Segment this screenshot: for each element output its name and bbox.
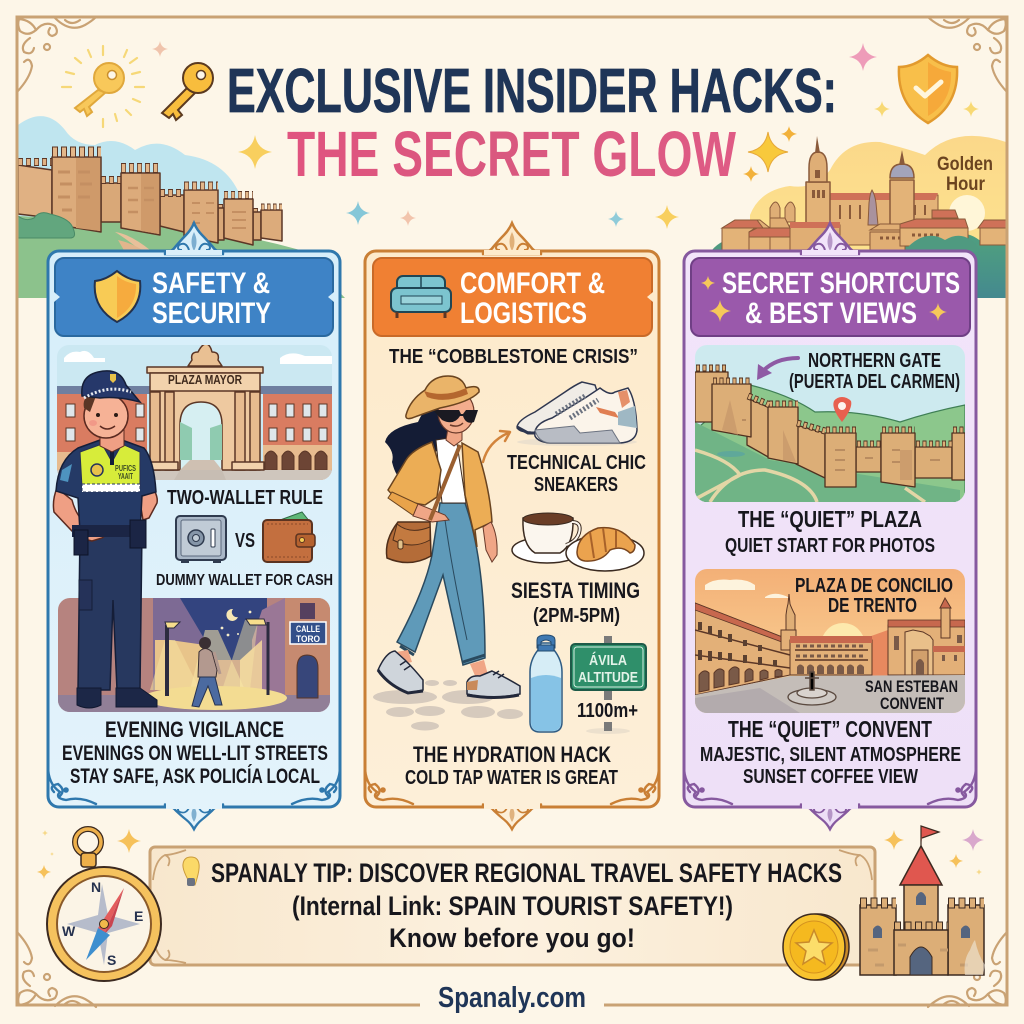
illustration: Plaza de Concilio de Trento: DE TRENTO xyxy=(828,595,917,617)
panel header: comfort xyxy=(373,258,653,336)
text: hydration hack xyxy=(405,742,618,789)
panel header: safety: SAFETY & xyxy=(152,267,270,300)
tip line 3: Know before you go! xyxy=(389,923,635,953)
icon: water bottle xyxy=(530,635,562,732)
main building xyxy=(825,195,938,245)
text: evening vigilance: EVENING VIGILANCE xyxy=(105,717,284,742)
ground xyxy=(695,675,965,713)
arms xyxy=(53,488,112,541)
panel header: comfort: LOGISTICS xyxy=(460,297,587,330)
icon: shield xyxy=(95,271,140,322)
text: sneakers: SNEAKERS xyxy=(534,474,618,496)
illustration: woman walking xyxy=(373,376,523,730)
icon: compass: S xyxy=(107,952,116,968)
text: sneakers: TECHNICAL CHIC xyxy=(507,452,646,474)
label: northern gate: NORTHERN GATE xyxy=(808,350,941,372)
vest: PUFICS xyxy=(115,464,136,473)
illustration: Northern Gate walls xyxy=(690,345,965,502)
trousers xyxy=(78,530,142,690)
cap xyxy=(82,371,140,402)
text: quiet convent: MAJESTIC, SILENT ATMOSPHERE xyxy=(700,744,961,766)
vest xyxy=(80,444,140,492)
icon: wallet with cash xyxy=(263,512,315,562)
sparkles around compass xyxy=(37,829,984,879)
title xyxy=(227,57,837,190)
icon: shield with check xyxy=(899,55,957,123)
triumphal arch xyxy=(154,392,256,471)
arrow to gate xyxy=(762,358,798,372)
illustration: Plaza de Concilio de Trento: CONVENT xyxy=(880,694,944,713)
title: THE SECRET GLOW xyxy=(287,118,736,190)
trousers xyxy=(397,503,485,665)
label: Golden Hour: Golden xyxy=(937,154,993,175)
icon: compass xyxy=(47,829,161,981)
shoes xyxy=(396,650,488,678)
illustration: Northern Gate walls: (PUERTA DEL CARMEN) xyxy=(789,371,960,393)
big tower xyxy=(806,182,830,228)
panel header: comfort: COMFORT & xyxy=(460,267,605,300)
text: evening vigilance xyxy=(62,717,328,788)
illustration: Plaza de Concilio de Trento: SAN ESTEBAN xyxy=(865,677,958,696)
footer: Spanaly.com: Spanaly.com xyxy=(438,982,586,1014)
sparkles xyxy=(152,41,979,229)
hands xyxy=(483,522,497,562)
label: Golden Hour xyxy=(938,156,992,190)
illustration: police officer xyxy=(53,371,157,708)
right convent xyxy=(888,625,965,675)
panel: safety and security xyxy=(48,223,340,829)
panel header: shortcuts: & BEST VIEWS xyxy=(745,297,917,330)
text: quiet plaza xyxy=(725,506,935,557)
hat xyxy=(406,376,479,419)
icon: altitude sign: ALTITUDE xyxy=(578,669,638,686)
head xyxy=(100,430,124,452)
text: siesta timing: (2PM-5PM) xyxy=(533,605,620,627)
arrow to sneakers xyxy=(483,431,510,462)
illustration: evening street: CALLE xyxy=(296,624,320,635)
icon: compass: N xyxy=(91,879,101,895)
cobbles xyxy=(373,680,523,730)
text: dummy wallet: DUMMY WALLET FOR CASH xyxy=(156,572,333,589)
jacket xyxy=(388,442,441,505)
icon: compass: E xyxy=(134,908,143,924)
text: quiet plaza: THE “QUIET” PLAZA xyxy=(738,506,922,532)
torso xyxy=(56,440,156,532)
panel header: safety: SECURITY xyxy=(152,297,271,330)
illustration: Plaza de Concilio de Trento xyxy=(695,569,965,713)
towers xyxy=(52,157,101,232)
strap xyxy=(430,445,460,520)
icon: gold key xyxy=(162,63,213,120)
text: quiet convent: SUNSET COFFEE VIEW xyxy=(743,766,918,788)
tip box xyxy=(150,847,875,965)
lower houses xyxy=(722,220,790,250)
text: siesta timing xyxy=(511,578,640,627)
panel: comfort and logistics xyxy=(365,223,659,829)
bag xyxy=(386,522,431,563)
wall segments xyxy=(18,165,52,218)
center building xyxy=(790,640,872,675)
panel header: safety xyxy=(54,258,334,336)
text: quiet convent xyxy=(700,716,961,788)
scene: Avila walls, left xyxy=(18,116,345,298)
illustration: evening street: TORO xyxy=(296,634,320,645)
text: hydration hack: THE HYDRATION HACK xyxy=(413,742,611,767)
vest: YAAIT xyxy=(118,472,133,481)
scene: Salamanca skyline, right xyxy=(712,136,1006,298)
icon: coffee and croissant xyxy=(512,513,644,571)
text: quiet plaza: QUIET START FOR PHOTOS xyxy=(725,535,935,557)
label: Golden Hour: Hour xyxy=(946,174,986,195)
wall segments xyxy=(695,372,965,487)
left colonnaded building xyxy=(695,603,790,695)
icon: compass: W xyxy=(62,923,76,939)
illustration: Plaza Mayor xyxy=(57,344,332,480)
tip line 2: (Internal Link: SPAIN TOURIST SAFETY!) xyxy=(292,891,733,921)
belt xyxy=(72,525,142,537)
text: evening vigilance: EVENINGS ON WELL-LIT STREETS xyxy=(62,742,328,765)
icon: light bulb xyxy=(183,857,199,886)
tip line 1: SPANALY TIP: DISCOVER REGIONAL TRAVEL SAFETY HACKS xyxy=(211,858,842,888)
text: cobblestone crisis: THE “COBBLESTONE CRISIS” xyxy=(389,346,638,368)
icon: altitude sign: 1100m+ xyxy=(577,700,638,722)
panel: secret shortcuts and best views xyxy=(684,223,976,829)
text: hydration hack: COLD TAP WATER IS GREAT xyxy=(405,767,618,789)
fountain xyxy=(788,672,836,705)
illustration: Plaza Mayor: PLAZA MAYOR xyxy=(168,373,242,387)
text: siesta timing: SIESTA TIMING xyxy=(511,578,640,603)
icon: sofa xyxy=(391,276,451,318)
text: two-wallet rule: TWO-WALLET RULE xyxy=(167,487,323,509)
icon: glowing key xyxy=(62,46,144,127)
icon: safe xyxy=(176,516,226,563)
boots xyxy=(77,688,101,708)
head xyxy=(446,428,462,446)
second dome xyxy=(890,180,914,225)
text: evening vigilance: STAY SAFE, ASK POLICÍA LOCAL xyxy=(70,765,320,788)
map pin xyxy=(833,397,851,422)
shirt xyxy=(436,437,466,503)
icon: gold coin xyxy=(783,914,849,980)
illustration: evening street xyxy=(58,598,330,712)
text: VS: VS xyxy=(235,530,255,552)
hair xyxy=(385,392,458,478)
panel header: shortcuts xyxy=(691,258,970,336)
icon: altitude sign: ÁVILA xyxy=(589,652,627,669)
icon: sneakers xyxy=(517,382,637,446)
text: quiet convent: THE “QUIET” CONVENT xyxy=(728,716,932,742)
text: sneakers xyxy=(507,452,646,496)
icon: altitude sign xyxy=(571,636,646,734)
icon: castle with flag xyxy=(860,826,985,975)
labels: PLAZA DE CONCILIO xyxy=(795,575,953,597)
